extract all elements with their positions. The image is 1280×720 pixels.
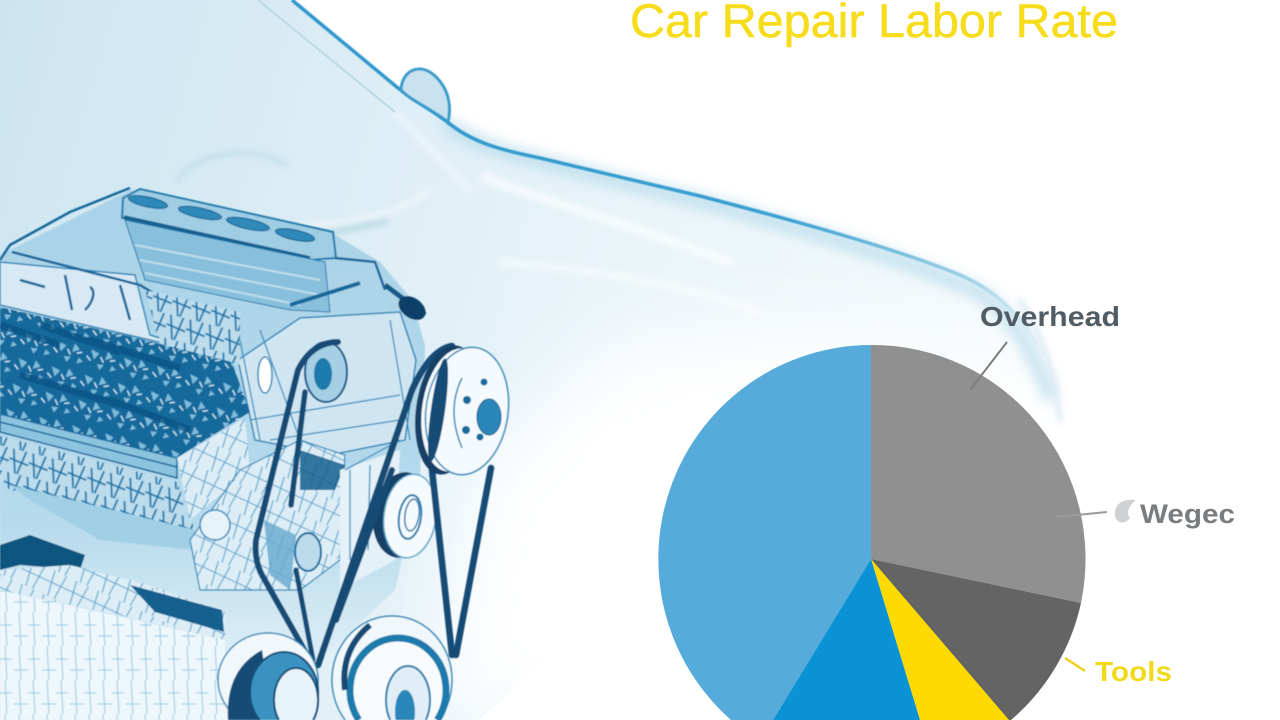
- slice: light blue: [658, 345, 871, 720]
- bottom left pulley: [218, 633, 318, 720]
- drive belts: [256, 342, 491, 665]
- valve cover body: [125, 220, 330, 312]
- exhaust ports: [0, 436, 195, 530]
- upper manifold panel: [0, 262, 232, 360]
- alternator: [295, 533, 321, 571]
- windshield edge line: [258, 0, 395, 112]
- slice: dark gray: [871, 559, 1081, 720]
- hood fade to white: [430, 330, 1280, 720]
- slice: yellow: [871, 559, 1009, 720]
- timing cover scribbles: [190, 440, 345, 590]
- intake runners: [145, 290, 240, 365]
- label: Overhead: [970, 301, 1120, 390]
- hood edge line: [292, 0, 1045, 360]
- label: Tools: Tools: [1095, 656, 1172, 687]
- label: Wegec: [1056, 499, 1235, 529]
- label: Tools: [1065, 656, 1172, 687]
- dark lower manifold: [0, 535, 85, 570]
- wiring harness: [0, 188, 385, 320]
- band under the hood edge: [445, 122, 1052, 400]
- idler pulley: [367, 468, 442, 562]
- label: Wegec: Wegec: [1140, 499, 1235, 529]
- mirror: [401, 69, 449, 122]
- slice: blue: [773, 559, 920, 720]
- engine body: [0, 190, 425, 720]
- bottom right pulley: [332, 616, 452, 720]
- label: Overhead: Overhead: [980, 301, 1120, 332]
- pie chart: [658, 345, 1086, 720]
- crank pulley right: [407, 341, 517, 480]
- valve cover top: [122, 189, 336, 260]
- cylinder head dark area: [0, 307, 250, 458]
- slice: gray: [871, 345, 1086, 603]
- toothed pulley upper: [305, 342, 347, 402]
- engine illustration: [0, 188, 517, 720]
- lower engine block: [0, 590, 225, 720]
- hood highlight stripes: [178, 112, 1060, 420]
